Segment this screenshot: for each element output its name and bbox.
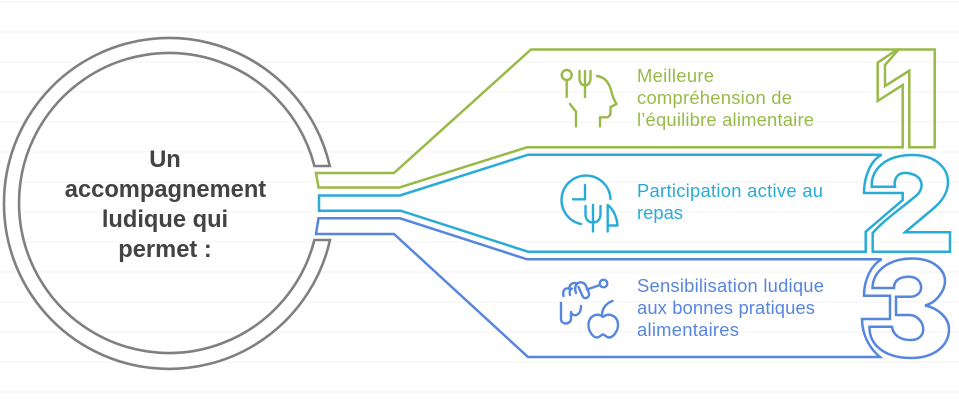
icon: hand with dial and apple <box>561 280 618 338</box>
text: item 3: aux bonnes pratiques <box>637 297 815 318</box>
number 3 <box>869 258 949 358</box>
icon: spoon, fork and head <box>562 70 616 126</box>
text: item 2: repas <box>637 202 683 223</box>
panel: ribbon 2 blue <box>319 155 950 252</box>
text: item 1: l’équilibre alimentaire <box>637 109 814 130</box>
heading: central title: Un <box>149 147 181 173</box>
text: item 3: alimentaires <box>637 319 739 340</box>
panel: central circle ring <box>4 38 330 369</box>
text: item 1: compréhension de <box>637 87 792 108</box>
panel: ribbon 3 indigo <box>316 218 949 358</box>
text: item 2: Participation active au <box>637 180 823 201</box>
number 1 <box>885 50 935 147</box>
text: item 3: Sensibilisation ludique <box>637 275 824 296</box>
icon: clock with fork and knife <box>562 176 618 232</box>
text: item 1: Meilleure <box>637 65 714 86</box>
panel: ribbon 1 green <box>316 50 935 188</box>
ribbon 3 outline <box>316 218 890 357</box>
heading: central title: permet : <box>118 237 212 263</box>
heading: central title: accompagnement <box>65 177 266 203</box>
ribbon 1 outline <box>316 50 903 188</box>
number 2 <box>872 155 950 252</box>
ribbon 2 outline <box>319 155 903 252</box>
heading: central title: ludique qui <box>102 207 228 233</box>
